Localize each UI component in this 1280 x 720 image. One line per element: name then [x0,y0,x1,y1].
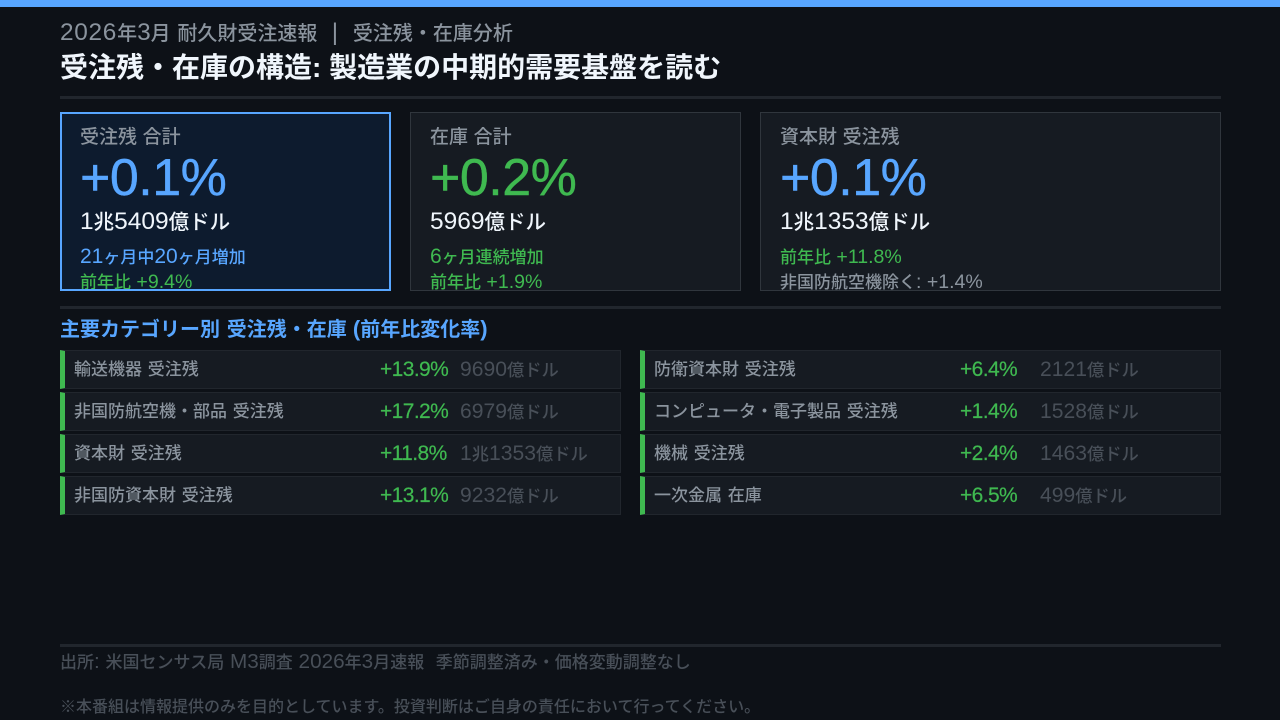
label: 資本財 受注残 [780,122,900,149]
row: nondefense aircraft: 非国防航空機・部品 受注残 [74,397,284,422]
panel: capital goods backlog [760,112,1221,291]
row: primary metals: 499億ドル [1040,482,1127,507]
panel: total backlog [60,112,391,291]
row: nondefense capital goods: 非国防資本財 受注残 [74,481,233,506]
row: machinery: 機械 受注残 [654,439,745,464]
subtitle: 2026年3月 耐久財受注速報 | 受注残・在庫分析 [60,17,513,46]
row: computers and electronics: コンピュータ・電子製品 受注残 [654,397,898,422]
change: +0.1% [80,149,226,207]
row: computers and electronics [640,392,1221,431]
row: defense capital goods: 防衛資本財 受注残 [654,355,796,380]
row: capital goods: +11.8% [380,442,447,465]
top accent bar [0,0,1280,7]
row: transport equipment: +13.9% [380,358,448,381]
row: defense capital goods [640,350,1221,389]
panel: total inventory [410,112,741,291]
row: nondefense capital goods: 9232億ドル [460,482,559,507]
note: streak: 21ヶ月中20ヶ月増加 [80,243,246,268]
amount: 5969億ドル [430,205,546,235]
row: transport equipment: 輸送機器 受注残 [74,355,199,380]
row: transport equipment [60,350,621,389]
row: defense capital goods: 2121億ドル [1040,356,1139,381]
row: capital goods: 1兆1353億ドル [460,440,588,465]
row: nondefense aircraft [60,392,621,431]
row: computers and electronics: 1528億ドル [1040,398,1139,423]
disclaimer: ※本番組は情報提供のみを目的としています。投資判断はご自身の責任において行ってください。 [60,693,760,717]
title: 受注残・在庫の構造: 製造業の中期的需要基盤を読む [60,46,721,86]
row: capital goods: 資本財 受注残 [74,439,182,464]
row: machinery: 1463億ドル [1040,440,1139,465]
row: computers and electronics: +1.4% [960,400,1017,423]
label: 在庫 合計 [430,122,512,149]
row: nondefense capital goods [60,476,621,515]
row: defense capital goods: +6.4% [960,358,1017,381]
change: +0.1% [780,149,926,207]
note: year over year: 前年比 +11.8% [780,243,902,268]
row: capital goods [60,434,621,473]
section heading: 主要カテゴリー別 受注残・在庫 (前年比変化率) [60,313,488,342]
row: machinery: +2.4% [960,442,1017,465]
row: nondefense aircraft: +17.2% [380,400,448,423]
row: primary metals: +6.5% [960,484,1017,507]
source note: 出所: 米国センサス局 M3調査 2026年3月速報 季節調整済み・価格変動調整なし [60,648,691,673]
amount: 1兆1353億ドル [780,205,930,235]
amount: 1兆5409億ドル [80,205,230,235]
row: nondefense capital goods: +13.1% [380,484,448,507]
row: primary metals [640,476,1221,515]
row: primary metals: 一次金属 在庫 [654,481,762,506]
label: 受注残 合計 [80,122,181,149]
row: nondefense aircraft: 6979億ドル [460,398,559,423]
row: transport equipment: 9690億ドル [460,356,559,381]
change: +0.2% [430,149,576,207]
note: streak: 6ヶ月連続増加 [430,243,544,268]
row: machinery [640,434,1221,473]
